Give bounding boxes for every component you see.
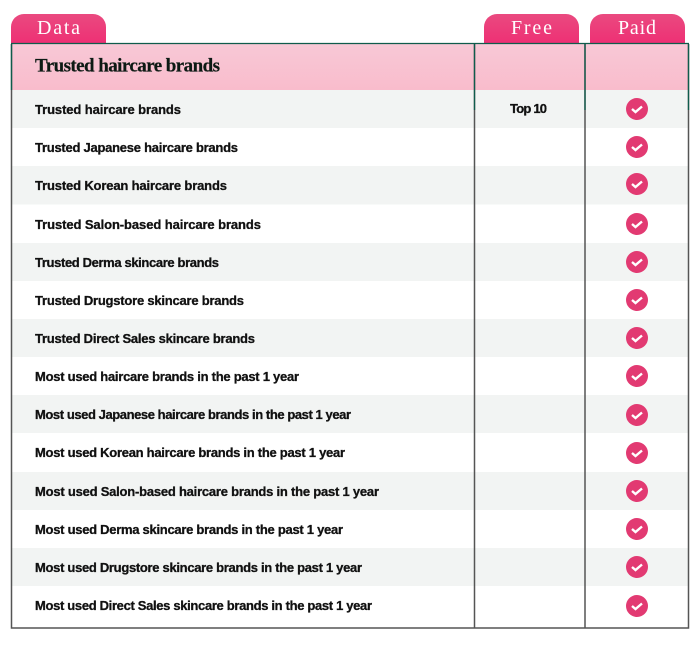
- row labels: Most used Drugstore skincare brands in the past 1 year: [35, 560, 362, 575]
- row labels: Most used Salon-based haircare brands in the past 1 year: [35, 484, 379, 499]
- row labels: Trusted Direct Sales skincare brands: [35, 331, 255, 346]
- tab: Free: Free: [511, 17, 552, 39]
- tab: Data: [11, 14, 106, 44]
- row labels: Trusted Korean haircare brands: [35, 178, 227, 193]
- row labels: Most used haircare brands in the past 1 year: [35, 369, 299, 384]
- row backgrounds: [12, 90, 688, 586]
- tab: Free: [484, 14, 579, 44]
- row labels: Most used Direct Sales skincare brands in the past 1 year: [35, 598, 372, 613]
- tab: Paid: Paid: [618, 17, 656, 39]
- paid column check icons: [626, 98, 648, 617]
- section header band: Trusted haircare brands: [35, 56, 220, 76]
- free column value: Top 10: Top 10: [510, 101, 547, 116]
- section header band: [12, 44, 688, 90]
- row labels: Most used Derma skincare brands in the past 1 year: [35, 522, 343, 537]
- tab: Paid: [590, 14, 685, 44]
- row labels: Trusted Salon-based haircare brands: [35, 217, 261, 232]
- row labels: Most used Korean haircare brands in the past 1 year: [35, 445, 345, 460]
- row labels: [35, 102, 379, 613]
- row labels: Most used Japanese haircare brands in the past 1 year: [35, 407, 351, 422]
- row labels: Trusted Derma skincare brands: [35, 255, 219, 270]
- row labels: Trusted haircare brands: [35, 102, 181, 117]
- row labels: Trusted Drugstore skincare brands: [35, 293, 244, 308]
- tab: Data: Data: [37, 17, 80, 39]
- row labels: Trusted Japanese haircare brands: [35, 140, 238, 155]
